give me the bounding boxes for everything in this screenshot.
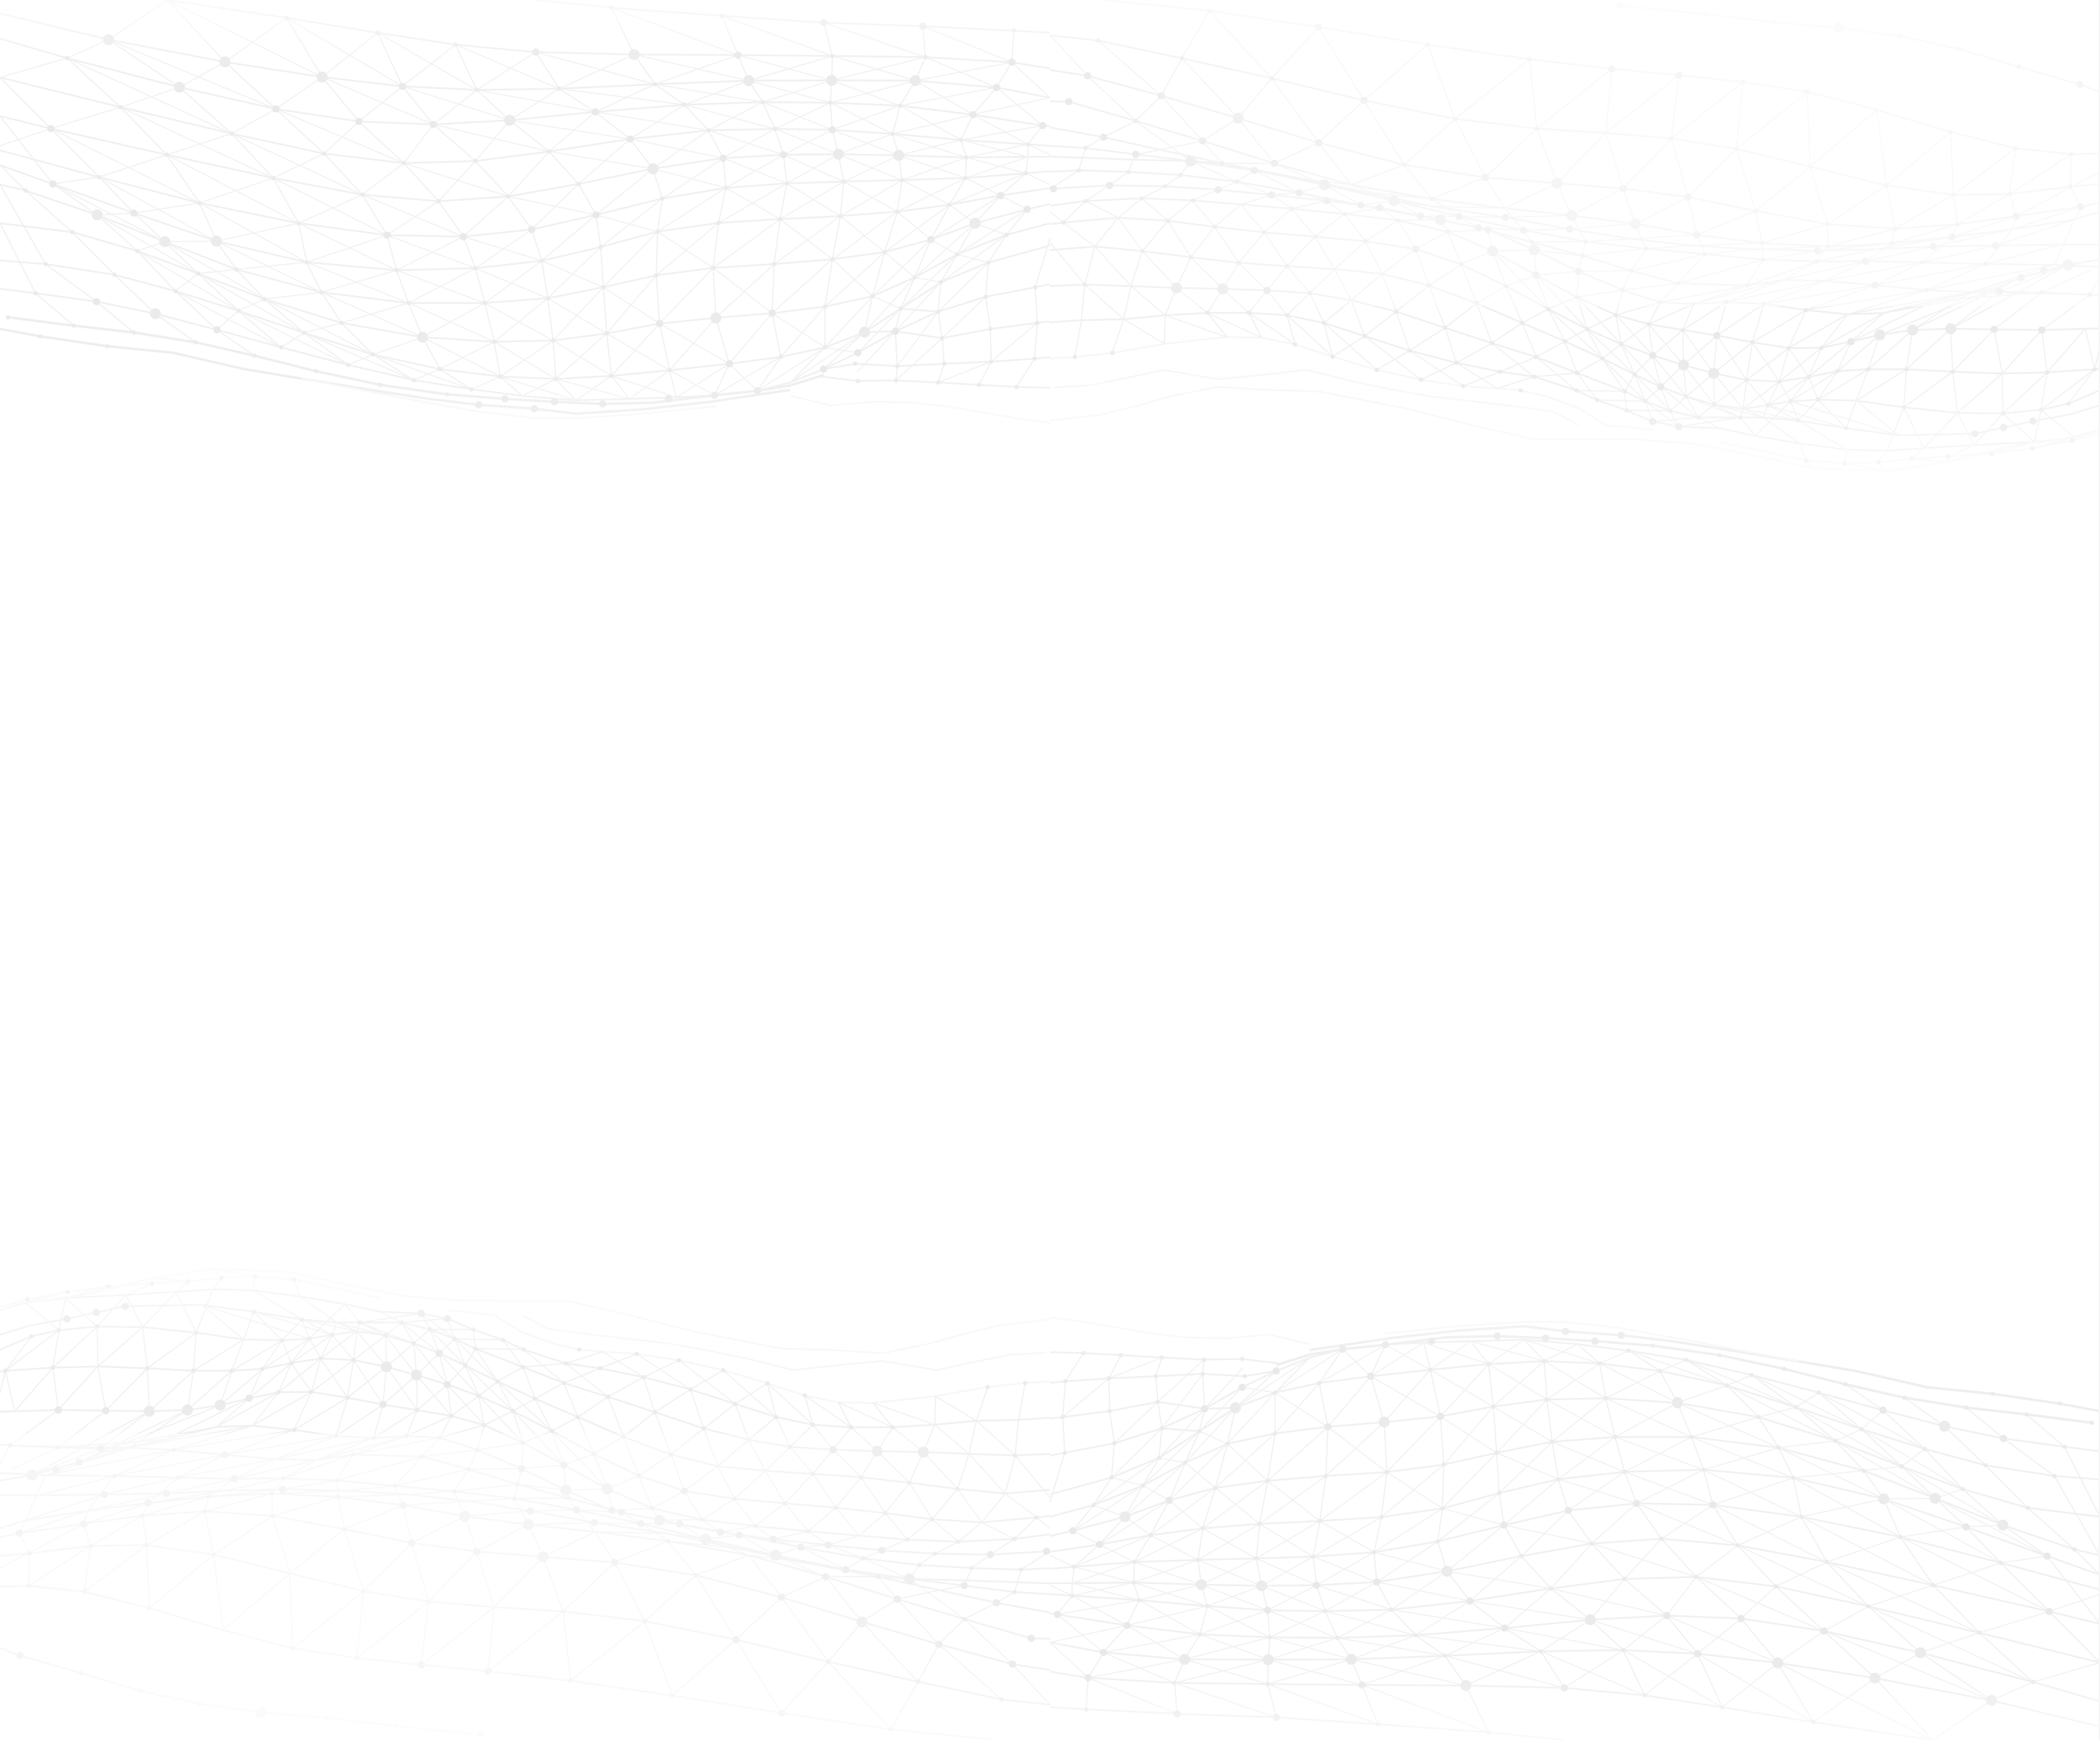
mesh nodes right, medium xyxy=(1054,6,2080,434)
right half of top mesh xyxy=(1050,0,2100,471)
mesh diagonals left xyxy=(0,0,1050,400)
mesh nodes right, small xyxy=(1063,11,2095,464)
fade: upper right xyxy=(875,0,2100,306)
mesh nodes left, medium xyxy=(51,23,1043,408)
left half of top mesh xyxy=(0,0,1050,423)
mesh rows left xyxy=(0,0,1050,400)
mesh rows right xyxy=(1050,0,2100,451)
mesh columns left xyxy=(0,0,1050,400)
mesh faint lower rows left xyxy=(301,378,1050,423)
panel: top mesh wave xyxy=(0,0,2100,481)
mesh columns right xyxy=(1050,11,2100,451)
fade: lower edge xyxy=(0,372,2100,481)
mesh fold edge left xyxy=(0,317,824,413)
panel: bottom mesh wave xyxy=(0,1259,2100,1740)
right edge hairline xyxy=(2099,0,2100,1740)
mesh diagonals right xyxy=(1050,11,2100,450)
fade: top edge xyxy=(0,0,2100,66)
mesh nodes left, small xyxy=(8,8,1038,395)
mesh nodes right, large xyxy=(1177,28,2068,373)
mesh faint lower rows right xyxy=(1050,337,2100,471)
mesh nodes left, large xyxy=(97,39,975,337)
